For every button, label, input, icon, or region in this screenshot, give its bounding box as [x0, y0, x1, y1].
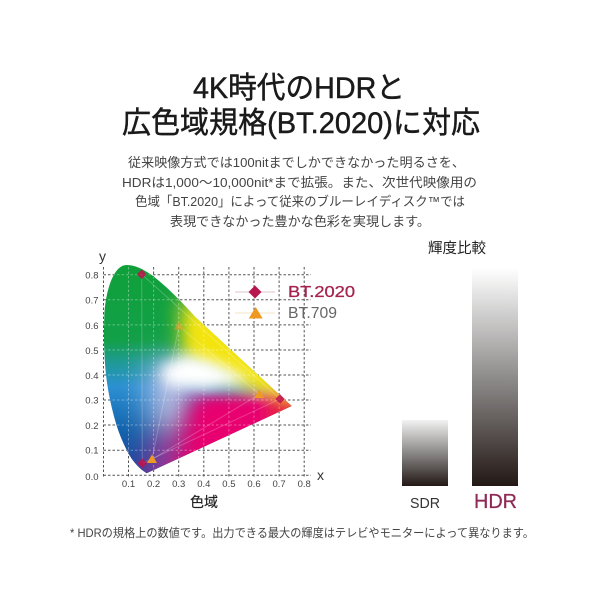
x axis labels: 0.6 — [247, 479, 261, 490]
legend — [235, 284, 355, 322]
x axis labels — [122, 479, 311, 490]
x axis labels: 0.4 — [197, 479, 210, 490]
y axis labels — [85, 270, 98, 483]
label: SDR: SDR — [410, 496, 440, 512]
chart: luminance comparison — [402, 240, 518, 513]
chart grid — [104, 267, 311, 478]
description text: 色域「BT.2020」によって従来のブルーレイディスク™では — [135, 194, 465, 209]
y axis labels: 0.5 — [85, 346, 98, 357]
chart: color gamut — [85, 248, 355, 510]
bar: SDR — [402, 420, 448, 486]
BT.709 markers — [147, 321, 264, 463]
y axis labels: 0.2 — [85, 421, 98, 432]
x axis labels: 0.7 — [272, 479, 286, 490]
axis letter x: x — [317, 467, 324, 483]
y axis labels: 0.4 — [85, 371, 98, 382]
y axis labels: 0.8 — [85, 270, 98, 282]
light grid inside gamut — [104, 267, 286, 470]
label: HDR: HDR — [474, 491, 517, 513]
description text — [122, 155, 477, 229]
y axis labels: 0.7 — [85, 296, 98, 306]
title: 広色域規格(BT.2020)に対応 — [122, 107, 480, 140]
axis letter y: y — [99, 248, 106, 264]
description text: 表現できなかった豊かな色彩を実現します。 — [170, 214, 430, 229]
x axis labels: 0.5 — [222, 479, 236, 490]
x axis labels: 0.2 — [147, 479, 160, 490]
title — [122, 72, 480, 140]
title: 4K時代のHDRと — [193, 72, 405, 105]
gamut triangles — [142, 274, 280, 463]
legend: BT.2020 — [288, 284, 355, 301]
y axis labels: 0.3 — [85, 396, 98, 406]
description text: HDRは1,000～10,000nit*まで拡張。また、次世代映像用の — [122, 175, 477, 190]
x axis labels: 0.1 — [122, 479, 135, 490]
y axis labels: 0.0 — [85, 472, 98, 483]
y axis labels: 0.6 — [85, 321, 98, 332]
legend: BT.709 — [288, 305, 337, 322]
x axis labels: 0.8 — [298, 479, 311, 490]
footnote: * HDRの規格上の数値です。出力できる最大の輝度はテレビやモニターによって異なります。 — [70, 526, 534, 540]
y axis labels: 0.1 — [85, 446, 98, 456]
gamut horseshoe — [104, 265, 292, 474]
chart caption: 色域 — [190, 494, 218, 510]
chart heading: 輝度比較 — [428, 240, 486, 257]
BT.2020 markers — [137, 270, 285, 468]
description text: 従来映像方式では100nitまでしかできなかった明るさを、 — [128, 155, 465, 170]
bar: HDR — [472, 268, 518, 486]
x axis labels: 0.3 — [172, 479, 185, 490]
